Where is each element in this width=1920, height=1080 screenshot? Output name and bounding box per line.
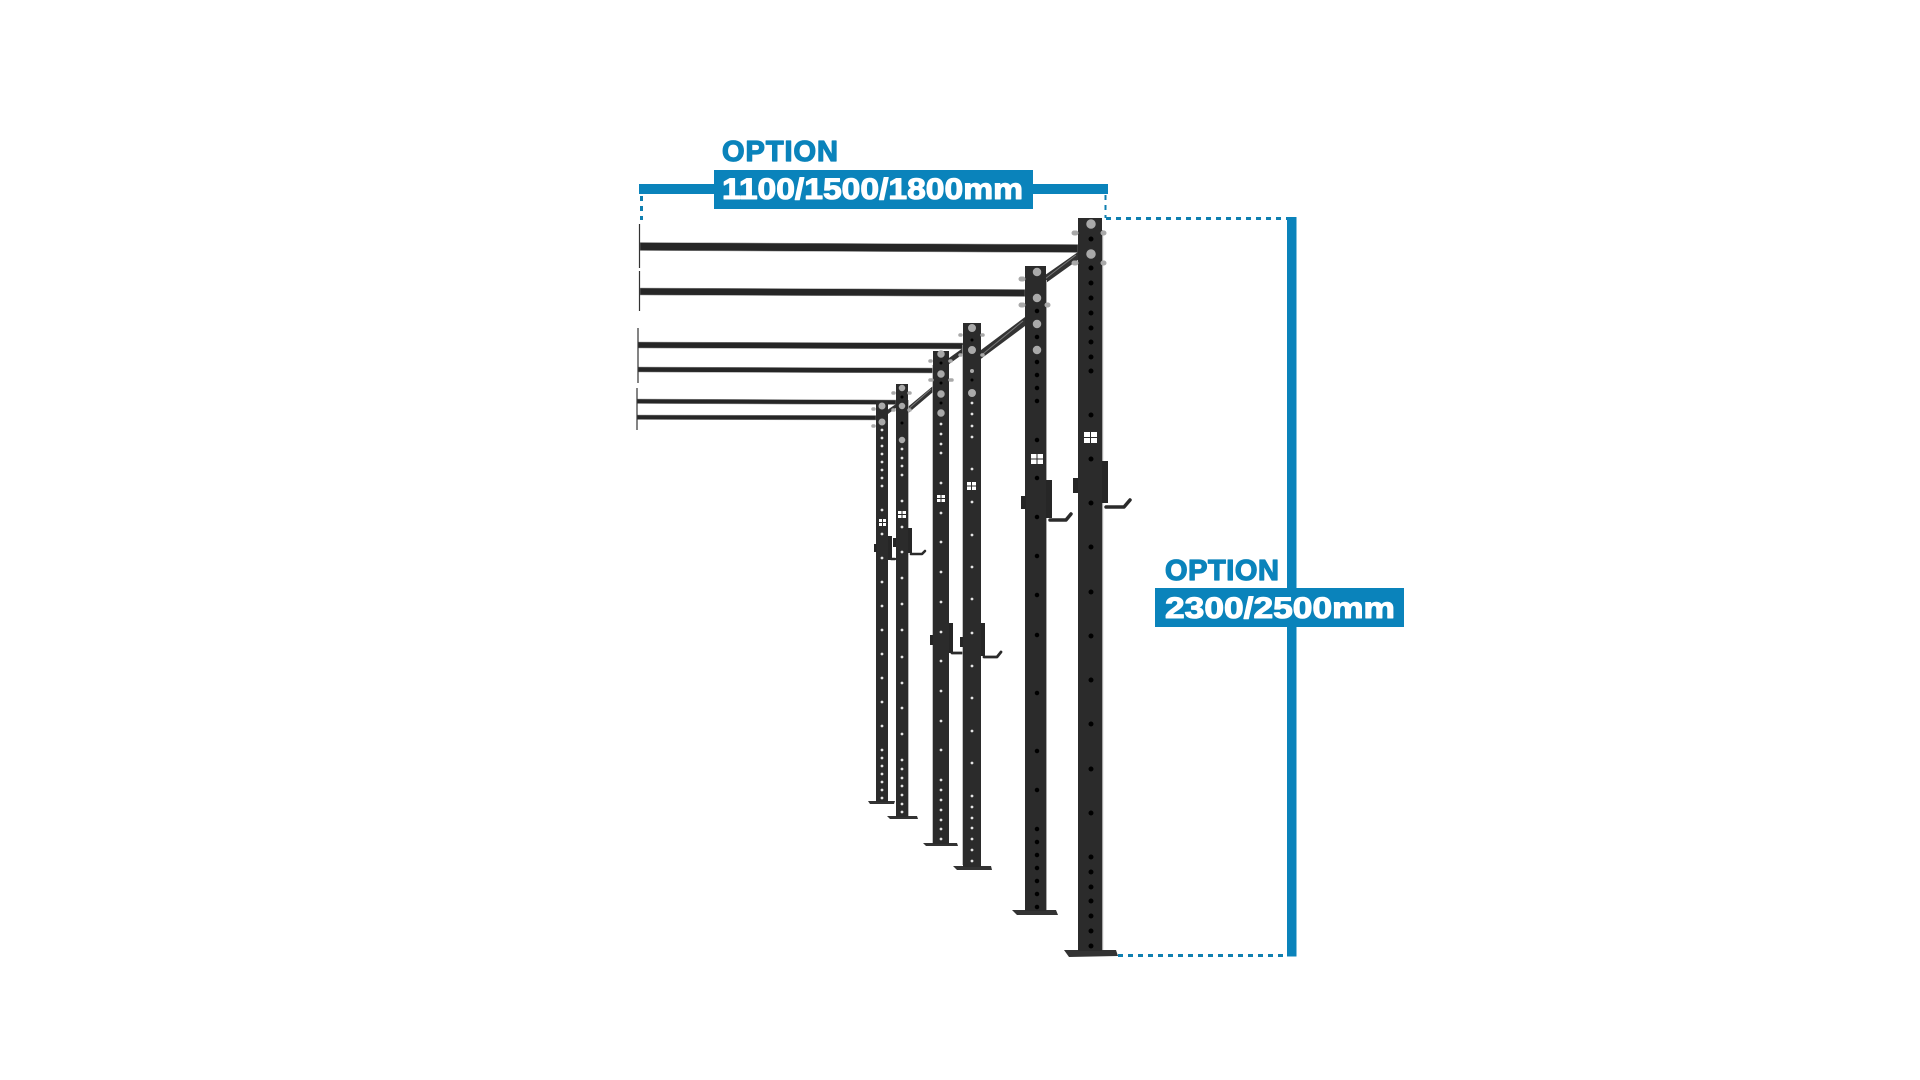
label: width option [714, 136, 1033, 209]
upright 6 [1064, 218, 1130, 957]
label: height option [1155, 555, 1404, 627]
label: height option: 2300/2500mm [1165, 592, 1395, 625]
pull-up bars [637, 224, 1078, 430]
upright 3 [923, 351, 962, 846]
label: width option: OPTION [722, 136, 838, 168]
upright 1 [868, 401, 895, 804]
label: width option: 1100/1500/1800mm [722, 173, 1023, 206]
upright 4 [953, 323, 1001, 870]
upright 5 [1012, 266, 1071, 915]
label: height option: OPTION [1165, 555, 1279, 587]
width dimension line [639, 184, 1108, 220]
height dimension line [1106, 217, 1296, 956]
upright 2 [887, 384, 925, 819]
rig illustration [637, 218, 1130, 957]
diagonal wall braces [877, 252, 1078, 420]
